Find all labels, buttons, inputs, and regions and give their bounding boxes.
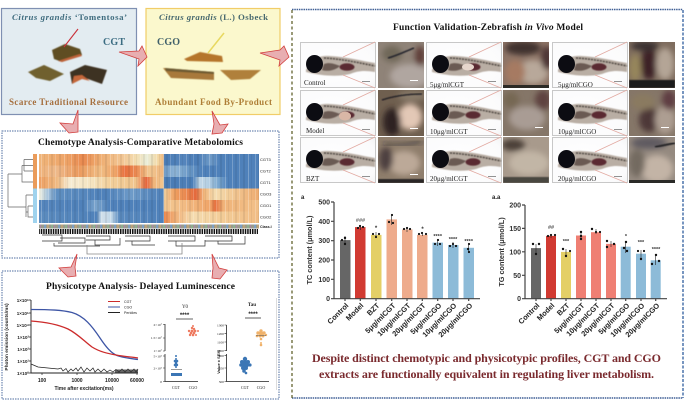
arrow: red pointer [64,29,78,47]
tick labels [17,298,29,376]
y tick labels: 150 [509,226,521,233]
curve: peridies noise [31,364,138,372]
label: CGO: CGO [157,37,180,48]
panel: physicotype analysis [2,271,279,399]
x labels: Model [344,301,365,323]
liver zoom: Model [378,90,426,136]
arrow: CGT to CGO [119,46,147,66]
x labels: BZT [365,301,382,318]
significance marks: **** [449,237,458,243]
significance marks: **** [433,234,443,240]
chart: metabolite heatmap [39,154,259,223]
x labels: 20μg/mlCGO [623,301,662,339]
axes [331,202,480,301]
x labels: 10μg/mlCGO [608,301,647,339]
caption: Scarce Traditional Resource: Scarce Traditional Resource [9,97,128,107]
chart: Y0 scatter: 2×10⁷ [154,323,163,327]
axis title y: Photon emission (counts/ms) [4,303,10,371]
bars [340,219,474,299]
significance marks: * [421,227,424,233]
heading: zebrafish: Function Validation-Zebrafish in Vivo Model [393,23,583,33]
sample labels: CGT1 [260,180,271,185]
fish: 5 CGO: 5μg/mlCGO [558,81,593,89]
heading: physicotype: Physicotype Analysis- Delayed Luminescence [46,282,235,292]
tick labels: 1×10⁵ [17,311,29,316]
significance marks: * [375,226,378,232]
chart: Tau scatter: **** [248,312,258,318]
arrow: CGO to chemotype [212,111,228,134]
y tick labels [318,200,330,303]
liver zoom: BZT [378,137,424,183]
side class bar [33,154,37,223]
x labels: 10μg/mlCGO [420,301,459,339]
tick labels: 1×10² [17,347,29,352]
chart: Tau scatter: 550 [219,366,224,370]
panel: CGO food by-product [146,8,280,114]
y tick labels: 0 [517,296,521,303]
significance marks: ### [356,218,365,224]
chart: Tau scatter [216,303,269,390]
error bars and points [341,214,470,253]
icon: CGO peel fragments [163,52,261,80]
chart: Y0 scatter: CGO [189,385,197,390]
y tick labels: 200 [318,258,330,264]
arrow: chemotype to physicotype right [212,254,227,279]
x labels [325,301,475,339]
liver zoom: 5 CGT [503,41,553,88]
sample labels [260,157,272,229]
x labels [516,301,662,339]
sample labels: Class.I [260,225,272,229]
chart: TC content [301,195,480,339]
chart: Tau scatter: CGO [257,385,265,390]
chart: Tau scatter: Value ± SEM [216,350,221,374]
axes [522,205,667,301]
significance marks: *** [563,239,570,245]
arrow: CGT to chemotype [60,110,78,133]
fish: Model: Model [306,127,324,135]
sample labels: CGT3 [260,157,271,162]
legend: CGO [124,306,132,310]
tick labels: 1×10¹ [17,359,29,364]
liver zoom: Control [378,42,424,88]
fish: 5 CGT [426,42,502,89]
legend: Peridies [124,311,137,315]
x labels: 20μg/mlCGT [390,301,428,338]
caption: Abundant Food By-Product: Abundant Food By-Product [155,97,272,107]
significance marks [356,218,474,245]
chart: Tau scatter: CGT [241,385,250,390]
fish: BZT [300,137,376,183]
fish: 20 CGT [426,137,502,183]
y tick labels: 50 [513,273,521,280]
axis title: TG content (μmol/L) [497,217,506,287]
significance marks: * [625,234,628,240]
chart: Tau scatter: 1000 [217,349,224,353]
tick labels: 1×10⁶ [17,298,29,303]
significance marks: ## [548,225,554,231]
icon: CGT peel fragments [28,44,107,84]
x labels: 10μg/mlCGT [564,301,602,338]
sample labels: CGO1 [260,203,272,208]
chart: Y0 scatter: 2×10⁶ [154,366,163,370]
x labels: BZT [555,301,572,318]
significance marks: **** [652,247,661,253]
x labels: 20μg/mlCGO [436,301,475,339]
x labels: 5μg/mlCGT [363,301,398,335]
arrow: CGO to zebrafish validation [260,46,289,66]
x tick labels: 10000 [105,378,119,384]
liver zoom: 20 CGT [501,137,549,183]
heading: chemotype: Chemotype Analysis-Comparative Metabolomics [38,138,243,148]
heading: Citrus grandis Osbeck: Citrus grandis (L.) Osbeck [159,12,268,22]
chart: Y0 scatter: **** [180,313,190,319]
x labels: 10μg/mlCGT [375,301,413,338]
axis title x: Time after excitation(ms) [54,386,114,392]
conclusion text: Despite distinct chemotypic and physicotypic profiles, CGT and CGO [312,351,661,365]
significance marks: **** [464,239,474,245]
fish: Model [300,90,376,136]
chart: Tau scatter: Tau [248,303,256,308]
fish: 20 CGO [552,137,628,183]
fish: 5 CGO [552,42,628,89]
chart: Y0 scatter [151,305,199,390]
fish: Control: Control [304,79,325,87]
liver zoom: 5 CGO [629,41,675,88]
x labels: Control [325,301,350,326]
y tick labels: 100 [509,249,521,256]
liver zoom: 20 CGO [629,137,675,183]
label: CGT: CGT [103,37,125,48]
conclusion text: extracts are functionally equivalent in regulating liver metabolism. [319,367,654,381]
sample labels: CGO3 [260,192,272,196]
chart: Y0 scatter: Y0 [182,305,189,310]
legend: CGT [124,300,132,304]
fish: 10 CGO: 10μg/mlCGO [558,128,596,136]
y tick labels: 500 [318,200,330,206]
tick labels: 1×10⁴ [17,323,29,328]
y tick labels: 100 [318,277,330,284]
chart: Tau scatter: 900 [219,354,224,358]
chart: Y0 scatter: 5×10⁶ [154,354,163,358]
class annotation bar [39,224,259,228]
y tick labels: 0 [326,296,330,303]
fish: 20 CGO: 20μg/mlCGO [558,175,596,183]
chart: Tau scatter: 500 [219,380,224,384]
fish: 20 CGT: 20μg/mlCGT [430,175,468,183]
tick labels: 1×10³ [17,335,29,340]
x labels: 5μg/mlCGO [408,301,444,336]
x tick labels: 60000 [130,378,144,384]
x labels: Control [516,301,541,326]
error bars and points [532,228,660,265]
fish: 10 CGT [426,90,502,136]
chart: Tau scatter: 1100 [217,340,224,344]
x labels: 20μg/mlCGT [579,301,617,338]
panel mark: a.a [492,195,501,201]
x labels: Model [535,301,556,323]
panel mark: a [301,195,305,201]
sample labels: CGT2 [260,168,271,174]
curve: CGO [31,310,138,360]
y tick labels: 200 [509,202,521,210]
fish: Control [300,42,376,88]
x tick labels: 100 [38,378,46,384]
conclusion text [312,351,661,381]
liver zoom: 10 CGT [503,90,551,136]
x labels: 5μg/mlCGT [552,301,587,335]
x tick labels [38,378,144,384]
chart: Y0 scatter: CGT [172,385,181,390]
panel: CGT traditional resource [2,8,136,114]
sample labels: CGO2 [260,214,272,220]
y tick labels: 300 [318,238,330,245]
panel: function validation [292,10,683,398]
tick labels: 1×10⁰ [17,371,29,376]
x labels: 5μg/mlCGO [596,301,632,336]
y tick labels: 400 [318,219,330,226]
chart: sample dendrogram [8,160,33,217]
chart: TG content [492,195,667,339]
significance marks: *** [638,240,645,246]
significance marks [548,225,661,253]
fish: 10 CGO [552,90,628,136]
fish: 5 CGT: 5μg/mlCGT [430,81,465,89]
chart: Y0 scatter: 1×10⁷ [154,349,163,353]
y tick labels [509,202,521,303]
legend [108,300,137,315]
heading: Citrus grandis Tomentosa: Citrus grandis ‘Tomentosa’ [12,12,127,22]
axis title: TC content (μmol/L) [305,215,314,284]
x tick labels: 1000 [71,378,83,384]
panel: chemotype analysis [2,131,279,258]
chart: Y0 scatter: 0 [160,380,162,384]
chart: Tau scatter: 1300 [217,324,224,328]
curve: CGT [31,321,138,358]
bars [531,232,661,299]
chart: delayed luminescence decay [4,298,144,392]
liver zoom: 10 CGO [629,90,676,136]
chart: Tau scatter: 1200 [217,332,224,336]
arrow: chemotype to physicotype left [59,254,77,277]
chart: metabolite dendrogram [39,229,258,254]
fish: BZT: BZT [306,175,320,183]
image grid: zebrafish micrographs [300,41,676,183]
chart: Y0 scatter: 1.5×10⁷ [151,336,163,340]
arrow: yellow pointer [208,33,224,53]
fish: 10 CGT: 10μg/mlCGT [430,128,468,136]
